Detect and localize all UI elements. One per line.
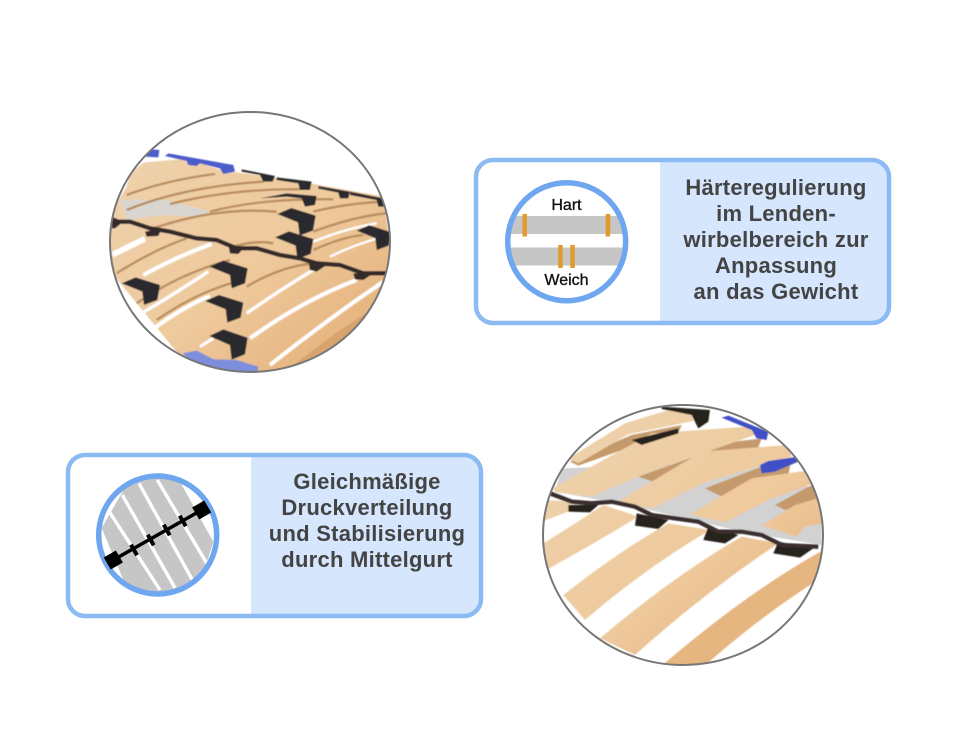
text: Druckverteilung [269, 469, 465, 572]
blue clips [145, 149, 235, 174]
slat shading [117, 174, 387, 320]
photo: slatted frame with centre belt [543, 405, 823, 668]
photo: slatted frame with hardness clips [111, 148, 389, 371]
grey gaps [555, 462, 822, 545]
text: Druckverteilung: und Stabilisierung [269, 521, 465, 546]
brown undersides [570, 425, 822, 510]
white gaps [113, 223, 390, 365]
blue clips [722, 416, 798, 473]
text: Härteregulierung: an das Gewicht [694, 279, 859, 304]
panel: Härteregulierung [476, 160, 889, 323]
upper slats [553, 410, 823, 537]
photo 2 outline [543, 405, 823, 665]
text: Härteregulierung: wirbelbereich zur [682, 227, 869, 252]
belt and clips [568, 407, 813, 558]
wood surface [107, 159, 393, 377]
lower slats [543, 500, 778, 655]
text: Druckverteilung: Gleichmäßige [293, 469, 441, 494]
icon: hart and weich slat adjustment: Weich [544, 272, 589, 289]
darker wood at lower right [294, 314, 365, 364]
text: Druckverteilung: durch Mittelgurt [281, 547, 453, 572]
text: Härteregulierung: im Lenden- [716, 201, 836, 226]
text: Druckverteilung: Druckverteilung [281, 495, 453, 520]
icon: hart and weich slat adjustment: Hart [551, 197, 582, 214]
icon: slats with centre belt [99, 470, 217, 600]
grey gaps [120, 200, 210, 220]
text: Härteregulierung: Härteregulierung [685, 175, 867, 200]
icon: hart and weich slat adjustment [505, 183, 630, 301]
belt [112, 222, 387, 273]
photo 1 outline [110, 112, 390, 372]
black clips [122, 169, 391, 360]
text: Härteregulierung: Anpassung [715, 253, 837, 278]
text: Härteregulierung [682, 175, 869, 304]
panel: Druckverteilung [68, 455, 481, 616]
